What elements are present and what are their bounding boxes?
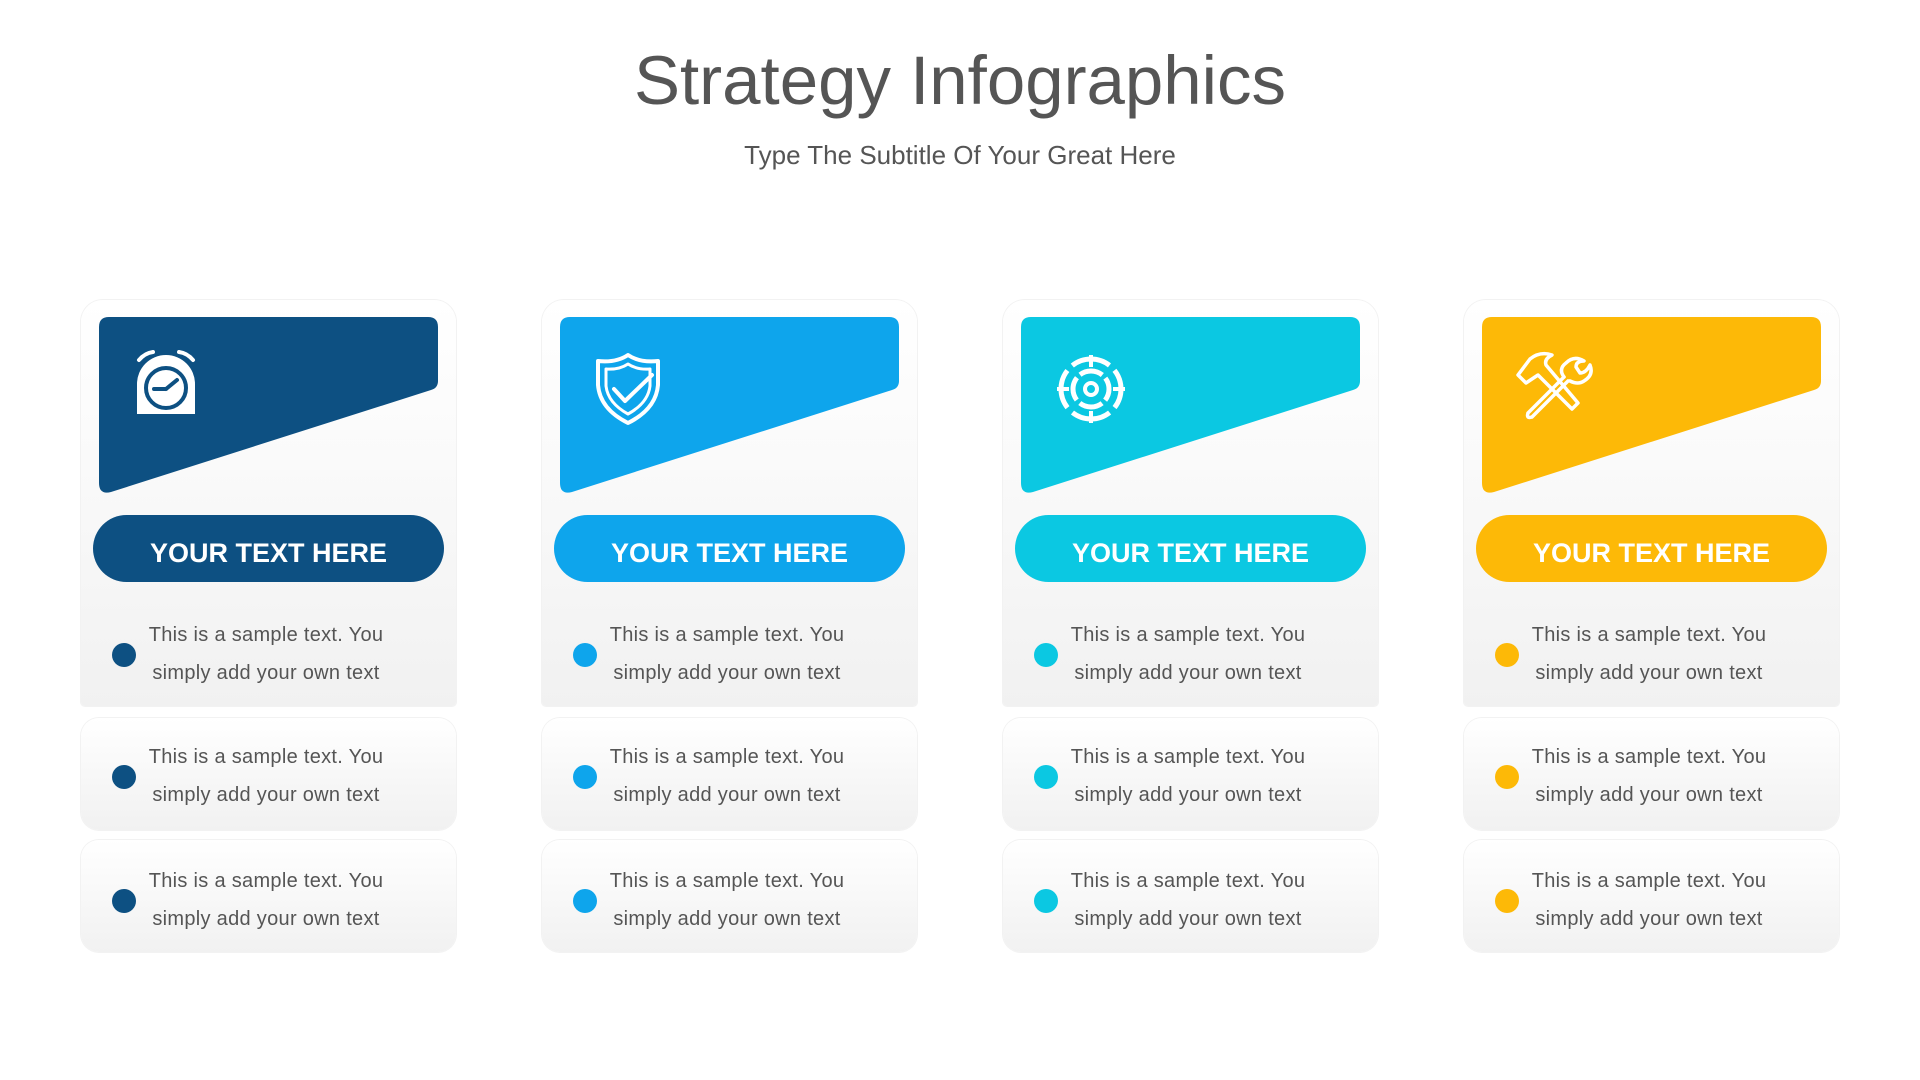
item 4.3: This is a sample text. You simply add your own text	[1532, 870, 1766, 930]
panel: card 3	[1002, 299, 1379, 953]
banner 2	[560, 317, 899, 493]
banner 3	[1021, 317, 1360, 493]
item 4.1: This is a sample text. You simply add your own text	[1532, 624, 1766, 684]
item 1.3: This is a sample text. You simply add your own text	[149, 870, 383, 930]
item 2.2: This is a sample text. You simply add your own text	[610, 746, 844, 806]
title: Strategy Infographics	[634, 42, 1286, 119]
banner 1	[99, 317, 438, 493]
pill heading 1	[93, 515, 444, 582]
panel: card 2	[541, 299, 918, 953]
icon: tools	[1518, 354, 1591, 418]
item 3.1: This is a sample text. You simply add your own text	[1071, 624, 1305, 684]
panel: card 4	[1463, 299, 1840, 953]
icon: shield check	[598, 355, 658, 423]
item 2.1: This is a sample text. You simply add your own text	[610, 624, 844, 684]
item 1.2: This is a sample text. You simply add your own text	[149, 746, 383, 806]
item 3.2: This is a sample text. You simply add your own text	[1071, 746, 1305, 806]
icon: alarm clock	[137, 352, 195, 414]
pill heading 2	[554, 515, 905, 582]
banner 4	[1482, 317, 1821, 493]
icon: target	[1057, 355, 1125, 423]
pill heading 4	[1476, 515, 1827, 582]
pill heading 3: YOUR TEXT HERE	[1072, 538, 1309, 568]
subtitle: Type The Subtitle Of Your Great Here	[744, 140, 1176, 170]
pill heading 3	[1015, 515, 1366, 582]
item 4.2: This is a sample text. You simply add your own text	[1532, 746, 1766, 806]
item 1.1: This is a sample text. You simply add your own text	[149, 624, 383, 684]
pill heading 2: YOUR TEXT HERE	[611, 538, 848, 568]
item 2.3: This is a sample text. You simply add your own text	[610, 870, 844, 930]
pill heading 1: YOUR TEXT HERE	[150, 538, 387, 568]
item 3.3: This is a sample text. You simply add your own text	[1071, 870, 1305, 930]
panel: card 1	[80, 299, 457, 953]
pill heading 4: YOUR TEXT HERE	[1533, 538, 1770, 568]
